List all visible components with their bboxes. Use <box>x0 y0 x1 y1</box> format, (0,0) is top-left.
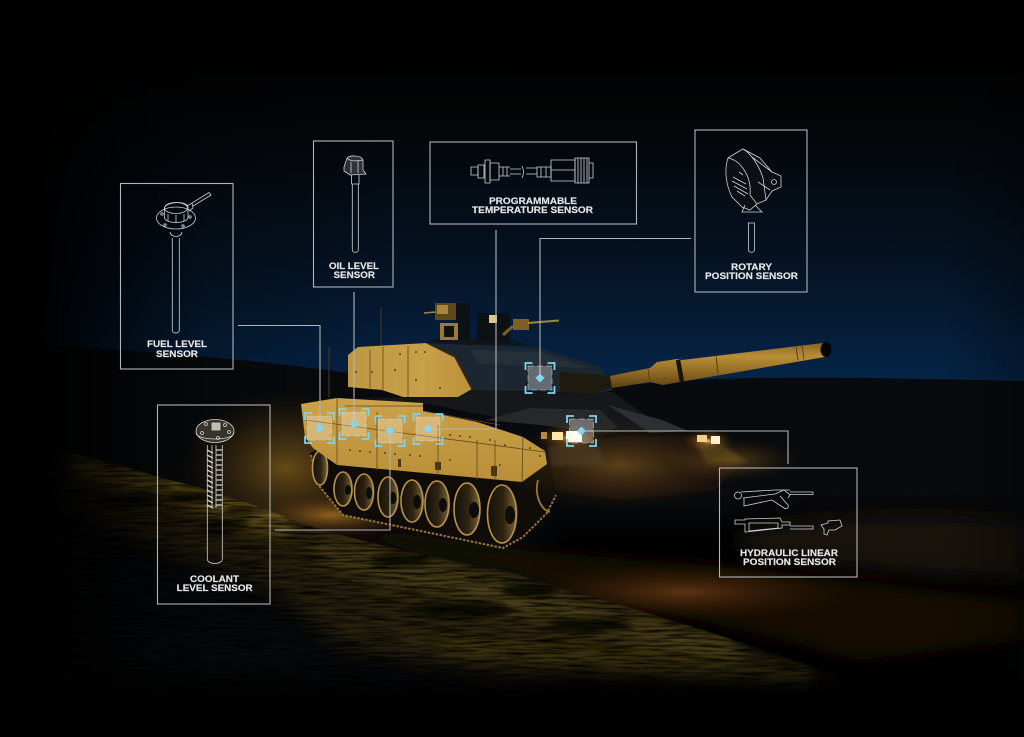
background <box>66 120 1024 688</box>
commander cupola and weapon stations <box>424 303 559 345</box>
panel: hydraulic linear position sensor: POSITION SENSOR <box>743 557 836 568</box>
hull panel lines <box>305 398 545 482</box>
dark turret <box>430 343 613 393</box>
muzzle <box>820 342 832 357</box>
distant hills <box>0 344 1024 737</box>
turret rivets <box>355 351 441 389</box>
wheel hubs <box>345 485 515 524</box>
glacis light plate <box>485 408 618 432</box>
rear aerials <box>329 307 381 398</box>
icon: fuel sensor <box>156 192 211 333</box>
label: FUEL LEVEL <box>147 339 207 350</box>
dark grass on the right <box>740 516 1024 580</box>
icon: rotary sensor <box>726 149 781 252</box>
marker: hydraulic <box>567 416 596 446</box>
panel: fuel level sensor <box>120 184 233 369</box>
front hull shadow <box>547 436 745 500</box>
label: COOLANT <box>190 574 239 585</box>
panel: oil level sensor: SENSOR <box>334 270 375 281</box>
yellow turret <box>348 343 472 397</box>
main gun barrel <box>610 343 825 388</box>
icon: coolant sensor <box>196 420 234 564</box>
night sky <box>0 60 1024 390</box>
hull rivets <box>349 434 541 466</box>
grass shadow patches <box>96 492 632 632</box>
upper hull dark deck <box>355 389 665 434</box>
rear glow behind tank <box>175 390 395 546</box>
road wheels <box>312 451 516 543</box>
drive sprocket <box>537 480 550 512</box>
panel: oil level sensor <box>314 141 393 287</box>
label: OIL LEVEL <box>329 261 379 272</box>
panel: rotary position sensor <box>695 130 807 292</box>
leader lines <box>238 230 788 530</box>
marker: oil <box>340 409 368 439</box>
marker: rotary <box>526 363 554 393</box>
grass body <box>90 490 822 682</box>
icon: oil sensor <box>344 156 366 252</box>
panel: coolant level sensor <box>158 405 270 604</box>
lower grass band <box>310 545 740 655</box>
yellow hull <box>301 398 547 482</box>
icon: temperature sensor <box>471 158 593 183</box>
marker: temperature <box>414 414 442 444</box>
dirt track glow rear <box>240 491 420 539</box>
marker: fuel <box>305 413 334 443</box>
panel: programmable temperature sensor <box>430 142 636 224</box>
dirt track glow front <box>515 562 855 622</box>
panel: hydraulic linear position sensor <box>720 468 857 577</box>
lower ground darkening <box>540 520 1024 737</box>
label: HYDRAULIC LINEAR <box>740 548 838 559</box>
label: ROTARY <box>731 262 773 273</box>
panel: rotary position sensor: POSITION SENSOR <box>705 271 798 282</box>
front plates <box>548 446 606 466</box>
tank <box>301 303 832 548</box>
icon: hydraulic sensor <box>734 490 842 535</box>
track and running gear <box>310 440 556 548</box>
bright grass crest <box>70 462 290 530</box>
headlights <box>536 424 734 453</box>
dirt track <box>300 525 1024 660</box>
turret panel lines <box>370 343 472 397</box>
label: PROGRAMMABLE <box>489 196 578 207</box>
grass blades texture <box>74 458 814 685</box>
lit grass on the left <box>68 454 822 688</box>
marker: coolant <box>376 416 404 446</box>
headlight fog <box>495 420 745 510</box>
gun mantlet <box>560 372 612 394</box>
panel: coolant level sensor: LEVEL SENSOR <box>177 583 253 594</box>
gun collar rings <box>678 360 682 382</box>
right headlight fog <box>660 438 800 482</box>
panel: programmable temperature sensor: TEMPERATURE SENSOR <box>472 205 593 216</box>
hull vents <box>398 459 497 476</box>
panel: fuel level sensor: SENSOR <box>156 349 198 360</box>
